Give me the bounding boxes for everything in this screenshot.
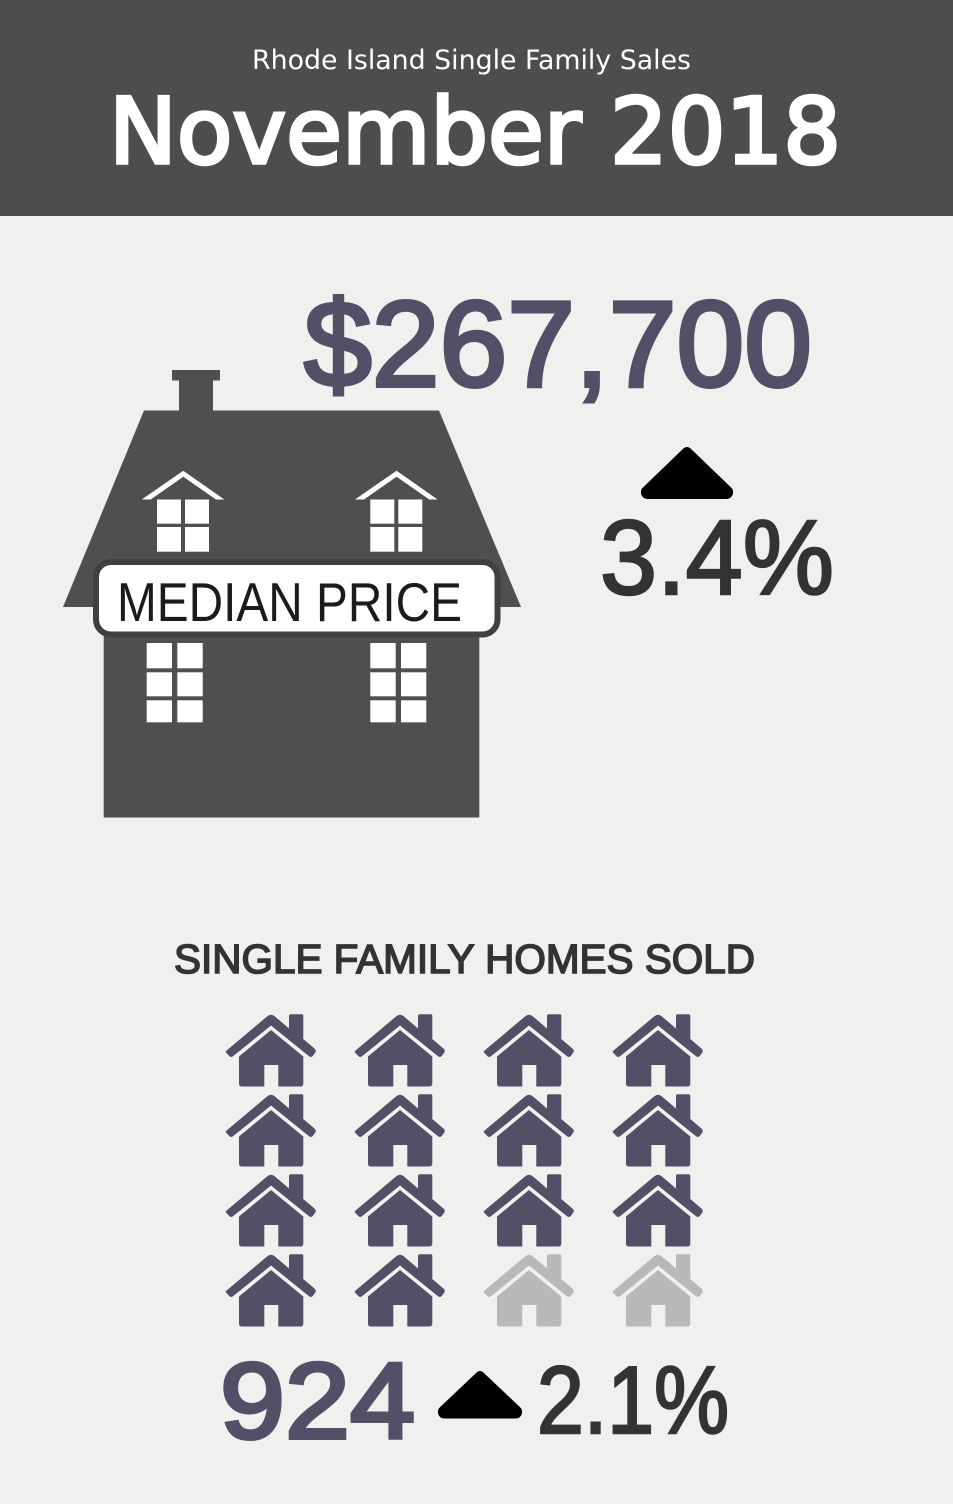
label text: MEDIAN PRICE [117, 571, 462, 633]
icon: up arrow for homes sold [442, 1376, 518, 1414]
row 2 [226, 1094, 703, 1166]
icon: right dormer window [355, 471, 438, 552]
row 1 [226, 1014, 703, 1086]
header banner [0, 0, 953, 216]
homes sold change percent: 2.1% [537, 1347, 729, 1454]
homes sold heading: SINGLE FAMILY HOMES SOLD [174, 936, 755, 982]
house body [104, 600, 479, 818]
row 3 [226, 1174, 703, 1246]
title: November 2018 [109, 80, 841, 185]
icon: up arrow for price [646, 452, 728, 494]
chimney [172, 370, 220, 411]
subtitle: Rhode Island Single Family Sales [252, 45, 691, 76]
row 4 filled homes [226, 1254, 445, 1326]
icon: large house with median price label [63, 370, 521, 818]
price change percent: 3.4% [600, 499, 834, 617]
homes sold value: 924 [220, 1340, 415, 1461]
icon: lower right window [370, 643, 426, 722]
pictogram: homes sold [226, 1014, 703, 1326]
label plate [96, 562, 498, 634]
median price value: $267,700 [304, 276, 812, 412]
icon: left dormer window [142, 471, 224, 552]
roof [63, 410, 521, 607]
icon: lower left window [147, 643, 203, 722]
row 4 grey homes [484, 1254, 703, 1326]
